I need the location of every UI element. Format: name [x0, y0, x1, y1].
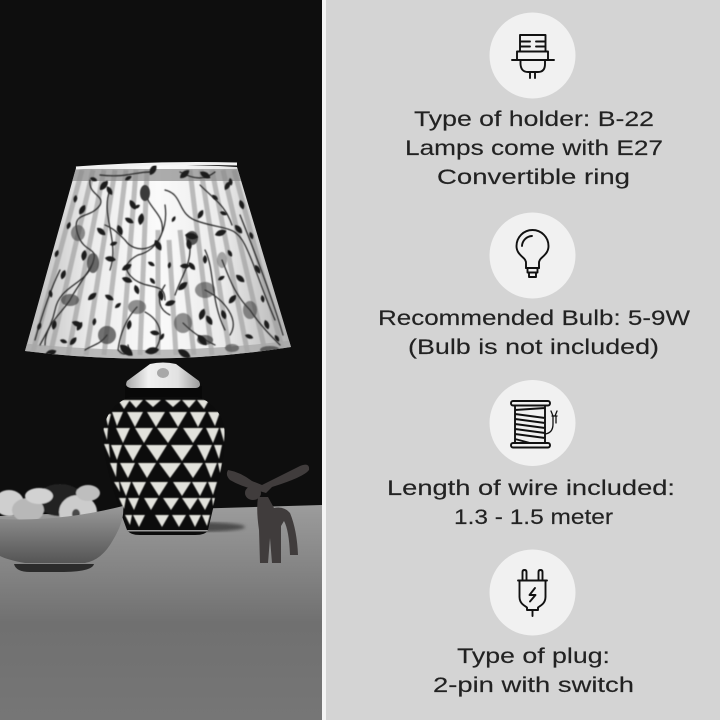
holder text: Convertible ring	[437, 165, 630, 189]
bulb text: Recommended Bulb: 5-9W	[378, 306, 691, 330]
plug text	[433, 644, 634, 697]
wire text: Length of wire included:	[387, 476, 675, 500]
bowl body	[0, 506, 123, 563]
plug text: Type of plug:	[457, 644, 610, 668]
floral vines	[35, 172, 283, 354]
icon: light bulb	[490, 212, 576, 298]
wire text: 1.3 - 1.5 meter	[454, 505, 613, 529]
lamp base cap	[125, 362, 202, 400]
shade top band	[70, 169, 245, 181]
holder text: Type of holder: B-22	[414, 107, 654, 131]
deer figurine	[227, 465, 309, 563]
bulb text	[378, 306, 691, 359]
spec: wire	[387, 380, 675, 529]
flowers	[0, 484, 100, 529]
bulb text: (Bulb is not included)	[408, 335, 659, 359]
holder text	[405, 107, 663, 189]
icon: wire spool	[490, 380, 576, 466]
plug text: 2-pin with switch	[433, 673, 634, 697]
pleated floral lampshade	[20, 163, 295, 368]
floral leaves	[36, 163, 280, 360]
icon: two-pin plug	[490, 550, 576, 636]
photo backdrop	[0, 0, 322, 720]
bowl with flowers	[0, 484, 123, 572]
shade bottom band	[25, 340, 291, 359]
floral blooms	[61, 185, 280, 354]
table surface	[0, 505, 322, 720]
shade top rim	[76, 164, 237, 168]
vase shadow	[145, 522, 245, 532]
photo edge stripe	[322, 0, 326, 720]
bowl foot	[14, 564, 94, 572]
shade pleats	[32, 170, 284, 355]
wire text	[387, 476, 675, 529]
spec: plug	[433, 550, 634, 697]
icon: bulb holder	[490, 12, 576, 98]
deer body and legs	[257, 497, 298, 563]
spec: bulb	[378, 212, 691, 359]
holder text: Lamps come with E27	[405, 136, 663, 160]
spec: holder	[405, 12, 663, 189]
ceramic vase	[103, 399, 225, 535]
panel: lamp photograph	[0, 0, 326, 720]
deer head	[245, 486, 261, 500]
deer antlers	[227, 465, 309, 493]
